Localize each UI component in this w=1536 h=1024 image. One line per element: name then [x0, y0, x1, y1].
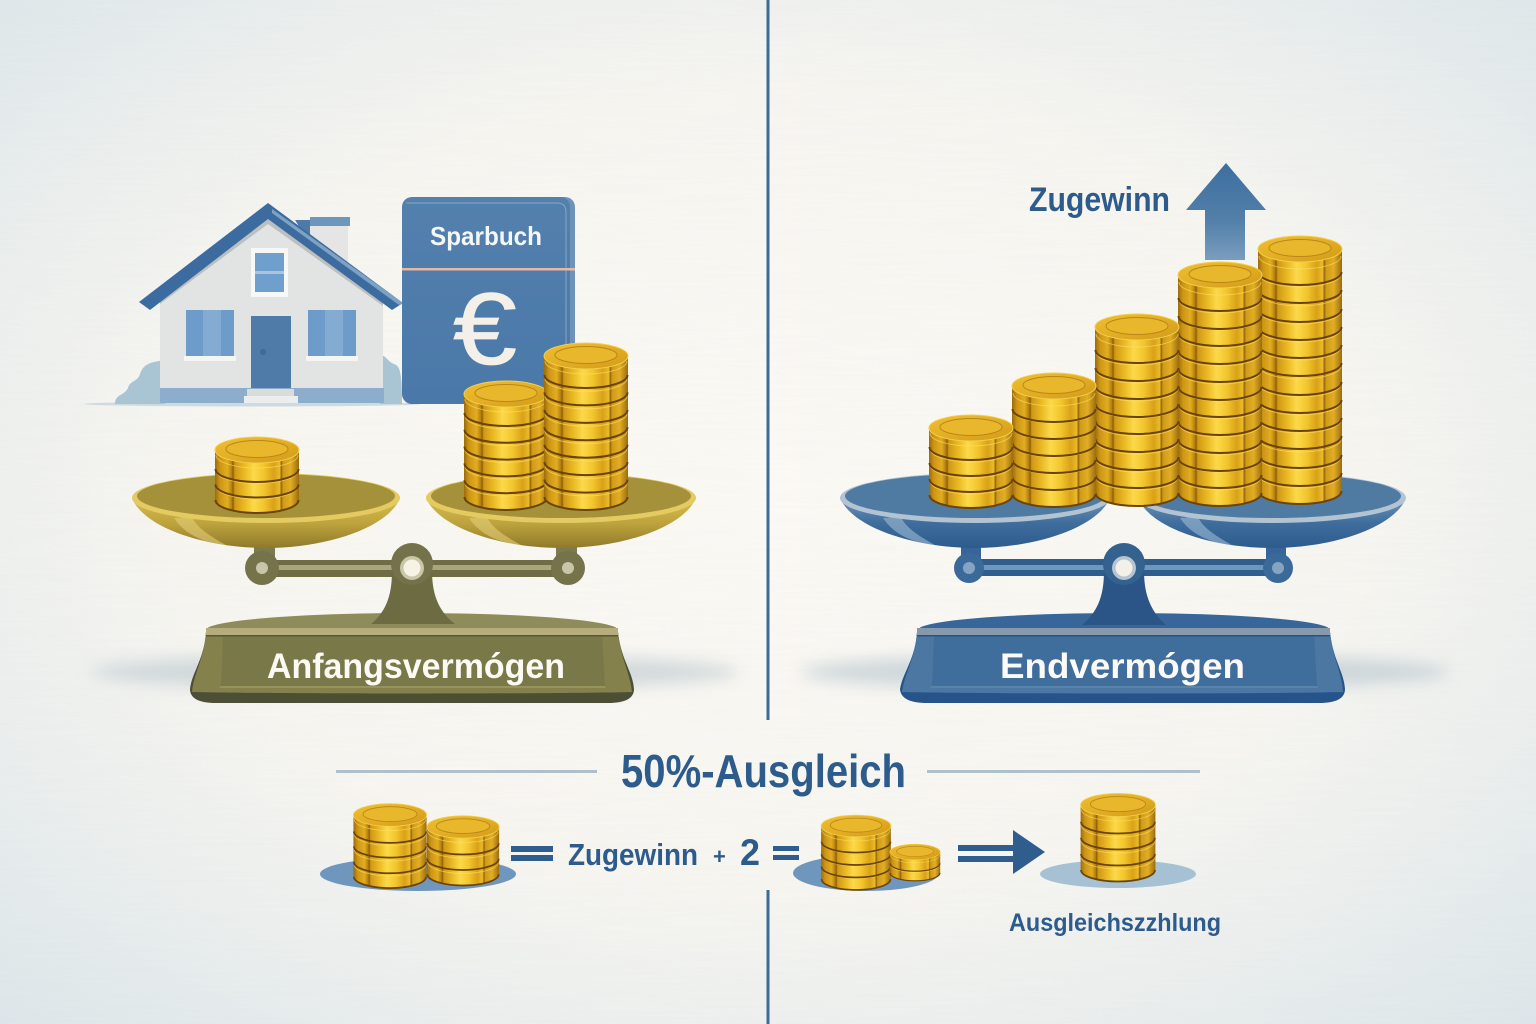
left gold pan	[132, 473, 400, 548]
book label: Sparbuch	[430, 221, 542, 251]
scale base with label	[190, 613, 634, 703]
coin stack: small left	[215, 437, 299, 513]
ground shadow	[800, 653, 1450, 691]
equals sign	[511, 846, 553, 861]
panel: Anfangsvermögen	[84, 197, 740, 703]
central divider lower	[766, 890, 770, 1024]
number 2: 2	[740, 832, 760, 873]
heading: 50%-Ausgleich	[621, 745, 906, 797]
left blue pan	[840, 473, 1110, 548]
formula text: Zugewinn	[568, 837, 698, 872]
scale base with label	[900, 613, 1345, 703]
right gold pan	[426, 473, 696, 548]
heading rule right	[927, 770, 1200, 773]
right blue pan	[1138, 473, 1406, 548]
plus sign: +	[713, 844, 726, 869]
coin stack 5	[1258, 236, 1342, 504]
panel: Endvermögen	[800, 163, 1450, 703]
label: Endvermógen	[1000, 647, 1245, 686]
euro symbol: €	[453, 272, 517, 386]
coins on plate: left	[320, 804, 516, 891]
central divider upper	[766, 0, 770, 720]
coin stack 3	[1095, 314, 1179, 506]
coins on plate: middle	[793, 815, 940, 891]
heading: Zugewinn: Zugewinn	[1029, 181, 1170, 219]
coin stack 1	[929, 415, 1013, 508]
label: Anfangsvermógen	[267, 647, 565, 686]
coins: payment	[1040, 793, 1196, 888]
coin stack: right pan tall	[544, 343, 628, 510]
coin stack 4	[1178, 262, 1262, 506]
ground shadow	[90, 653, 740, 691]
icon: house	[84, 203, 420, 406]
coin stack 2	[1012, 373, 1096, 507]
scale beam and stand	[954, 538, 1293, 625]
scale beam and stand	[245, 540, 585, 624]
payment label: Ausgleichszzhlung	[1009, 909, 1221, 937]
heading rule left	[336, 770, 597, 773]
panel: 50%-Ausgleich	[320, 745, 1221, 937]
icon: savings book	[402, 197, 575, 404]
arrow: to payment	[958, 830, 1045, 874]
equals sign	[773, 846, 799, 860]
arrow: gain up	[1186, 163, 1266, 260]
coin stack: right pan short	[464, 381, 548, 510]
